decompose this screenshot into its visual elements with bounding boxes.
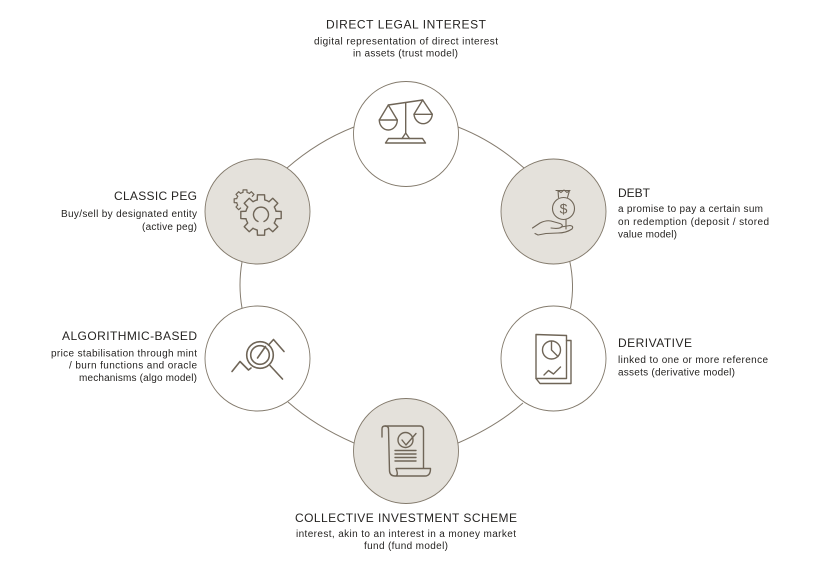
label: derivative	[618, 336, 768, 378]
label: collective investment scheme: fund (fund model)	[364, 541, 448, 552]
node: algorithmic-based	[205, 306, 310, 411]
label: derivative: DERIVATIVE	[618, 336, 692, 350]
label: direct legal interest: digital representation of direct interest	[314, 36, 498, 48]
connecting ring	[240, 127, 573, 443]
label: algorithmic-based: mechanisms (algo model)	[79, 373, 197, 384]
label: collective investment scheme	[295, 511, 517, 552]
label: algorithmic-based: price stabilisation through mint	[51, 348, 197, 360]
label: direct legal interest: in assets (trust model)	[353, 48, 458, 60]
label: classic peg: (active peg)	[142, 222, 197, 233]
label: debt: on redemption (deposit / stored	[618, 217, 769, 228]
label: debt: value model)	[618, 230, 677, 240]
node: collective investment scheme	[354, 398, 458, 504]
label: classic peg: CLASSIC PEG	[114, 189, 197, 203]
icon: report pages	[536, 334, 571, 384]
label: collective investment scheme: COLLECTIVE INVESTMENT SCHEME	[295, 511, 517, 525]
label: direct legal interest: DIRECT LEGAL INTEREST	[326, 18, 487, 32]
label: collective investment scheme: interest, akin to an interest in a money market	[296, 529, 516, 540]
node: debt	[501, 159, 606, 264]
icon: gears	[234, 190, 281, 235]
node: direct legal interest	[354, 82, 458, 186]
label: debt	[618, 186, 769, 240]
icon: scales	[379, 100, 432, 143]
label: debt: a promise to pay a certain sum	[618, 204, 763, 215]
label: derivative: assets (derivative model)	[618, 368, 735, 378]
label: direct legal interest	[314, 18, 498, 60]
icon: dollar sign: $	[560, 200, 568, 216]
node: classic peg	[205, 159, 310, 264]
label: algorithmic-based	[51, 329, 197, 384]
label: classic peg: Buy/sell by designated entity	[61, 209, 197, 220]
icon: money bag in hand	[532, 190, 574, 235]
label: derivative: linked to one or more reference	[618, 355, 768, 366]
label: algorithmic-based: / burn functions and oracle	[69, 360, 197, 372]
icon: magnifier over chart	[232, 340, 284, 379]
node: derivative	[501, 306, 606, 411]
label: algorithmic-based: ALGORITHMIC-BASED	[62, 329, 197, 343]
icon: scroll with check	[382, 426, 430, 476]
label: classic peg	[61, 189, 197, 233]
label: debt: DEBT	[618, 186, 651, 200]
